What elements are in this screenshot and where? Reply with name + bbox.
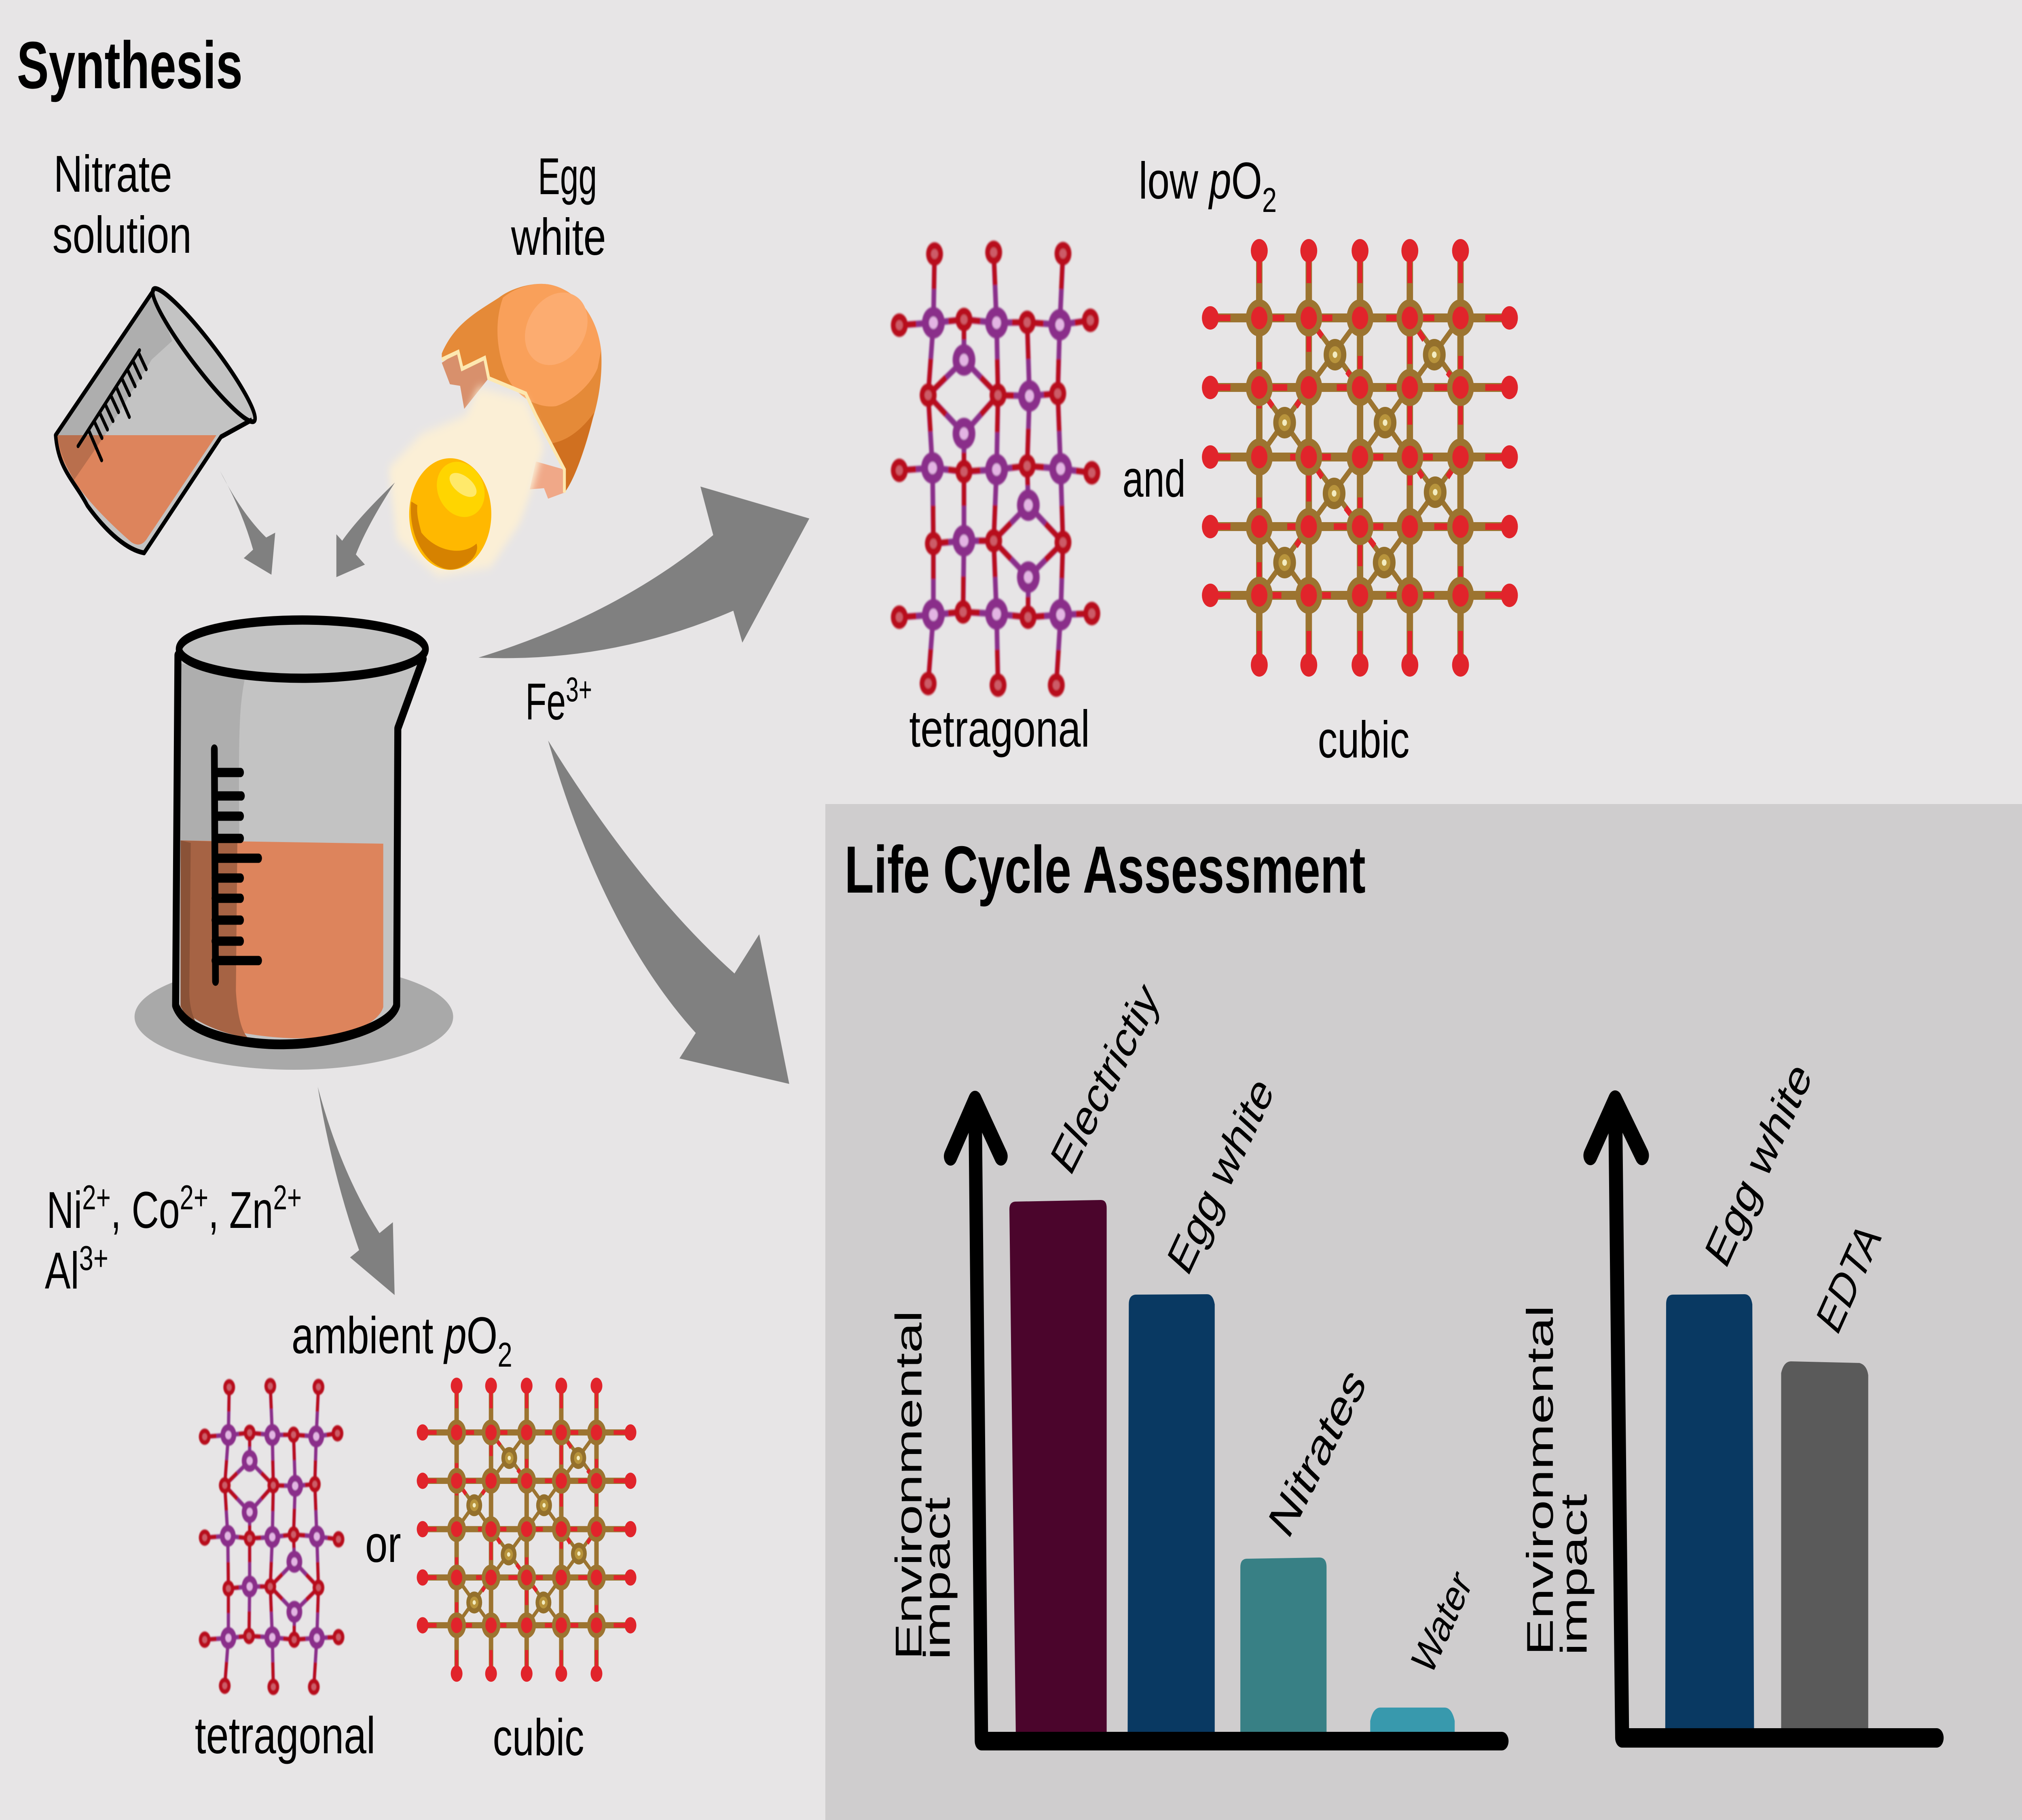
label: Egg white: white [511, 208, 606, 266]
label: or: or [365, 1515, 401, 1573]
label: Nitrates: Nitrates [1261, 1357, 1374, 1547]
label: Ni, Co, Zn, Al ions: Ni [47, 1181, 82, 1239]
heading: Synthesis: Synthesis [17, 28, 243, 103]
icon: tilted pouring beaker [56, 278, 262, 553]
label: Ni, Co, Zn, Al ions: Al [45, 1242, 78, 1300]
arrow: to life cycle assessment [548, 741, 789, 1084]
bar: Egg white [1665, 1294, 1754, 1735]
label: Ni, Co, Zn, Al ions: 3+ [79, 1239, 108, 1277]
icon: cracked egg [389, 279, 601, 576]
label: ambient pO2: ambient pO [292, 1306, 495, 1365]
bar: Water [1370, 1708, 1455, 1735]
label: Ni, Co, Zn, Al ions [45, 1178, 302, 1300]
bar: EDTA [1781, 1361, 1868, 1735]
label: EDTA: EDTA [1808, 1213, 1889, 1343]
crystal structure: cubic, low pO2 [1202, 239, 1518, 677]
label: low pO2: 2 [1262, 181, 1277, 219]
crystal structure: tetragonal, low pO2 [891, 241, 1100, 697]
label: Ni, Co, Zn, Al ions: , Zn [208, 1181, 273, 1239]
axis label: Environmental impact: impact [1553, 1494, 1595, 1655]
label: Ni, Co, Zn, Al ions: 2+ [180, 1178, 208, 1217]
label: Egg white [511, 147, 606, 266]
label: cubic: cubic [1318, 711, 1410, 769]
label: Egg white: Egg white [1697, 1052, 1820, 1277]
bar: Egg white [1127, 1294, 1215, 1735]
bar: Nitrates [1240, 1558, 1326, 1735]
axes [1591, 1100, 1937, 1738]
axis label: Environmental impact [1519, 1305, 1595, 1655]
label: Fe3+: Fe [525, 673, 569, 731]
label: low pO2: low pO [1139, 152, 1260, 210]
bar: Electricity [1009, 1200, 1107, 1735]
label: tetragonal: tetragonal [909, 700, 1090, 758]
label: Nitrate solution: solution [53, 206, 192, 264]
axis label: Environmental impact: Environmental [1519, 1305, 1561, 1655]
axes [951, 1100, 1502, 1741]
chart: egg white vs EDTA [1519, 1052, 1937, 1738]
label: Egg white: Egg [538, 147, 597, 205]
icon: main beaker with solution [135, 620, 453, 1070]
arrow: to low pO2 structures [478, 487, 809, 658]
label: ambient pO2: 2 [497, 1335, 512, 1374]
arrow: egg white into beaker [336, 483, 395, 577]
label: tetragonal: tetragonal [195, 1706, 375, 1765]
chart: environmental impact by input [888, 972, 1502, 1741]
axis label: Environmental impact [888, 1310, 958, 1660]
label: Electrictiy: Electrictiy [1043, 972, 1167, 1184]
label: Fe3+: 3+ [566, 670, 592, 709]
heading: Life Cycle Assessment: Life Cycle Assessment [844, 833, 1366, 907]
crystal structure: cubic, ambient pO2 [417, 1378, 637, 1682]
axis label: Environmental impact: Environmental [888, 1310, 929, 1660]
arrow: nitrate into beaker [220, 471, 275, 575]
label: Ni, Co, Zn, Al ions: 2+ [273, 1178, 302, 1217]
label: and: and [1122, 450, 1186, 508]
arrow: to ambient pO2 structures [318, 1087, 395, 1295]
label: cubic: cubic [493, 1708, 584, 1767]
crystal structure: tetragonal, ambient pO2 [199, 1378, 345, 1695]
label: Water: Water [1404, 1561, 1479, 1682]
panel: life cycle assessment background [825, 804, 2022, 1820]
label: Nitrate solution [53, 145, 192, 264]
label: Nitrate solution: Nitrate [54, 145, 172, 203]
label: Egg white: Egg white [1159, 1066, 1282, 1284]
label: Ni, Co, Zn, Al ions: , Co [111, 1181, 180, 1239]
axis label: Environmental impact: impact [916, 1497, 958, 1660]
label: Ni, Co, Zn, Al ions: 2+ [82, 1178, 111, 1217]
